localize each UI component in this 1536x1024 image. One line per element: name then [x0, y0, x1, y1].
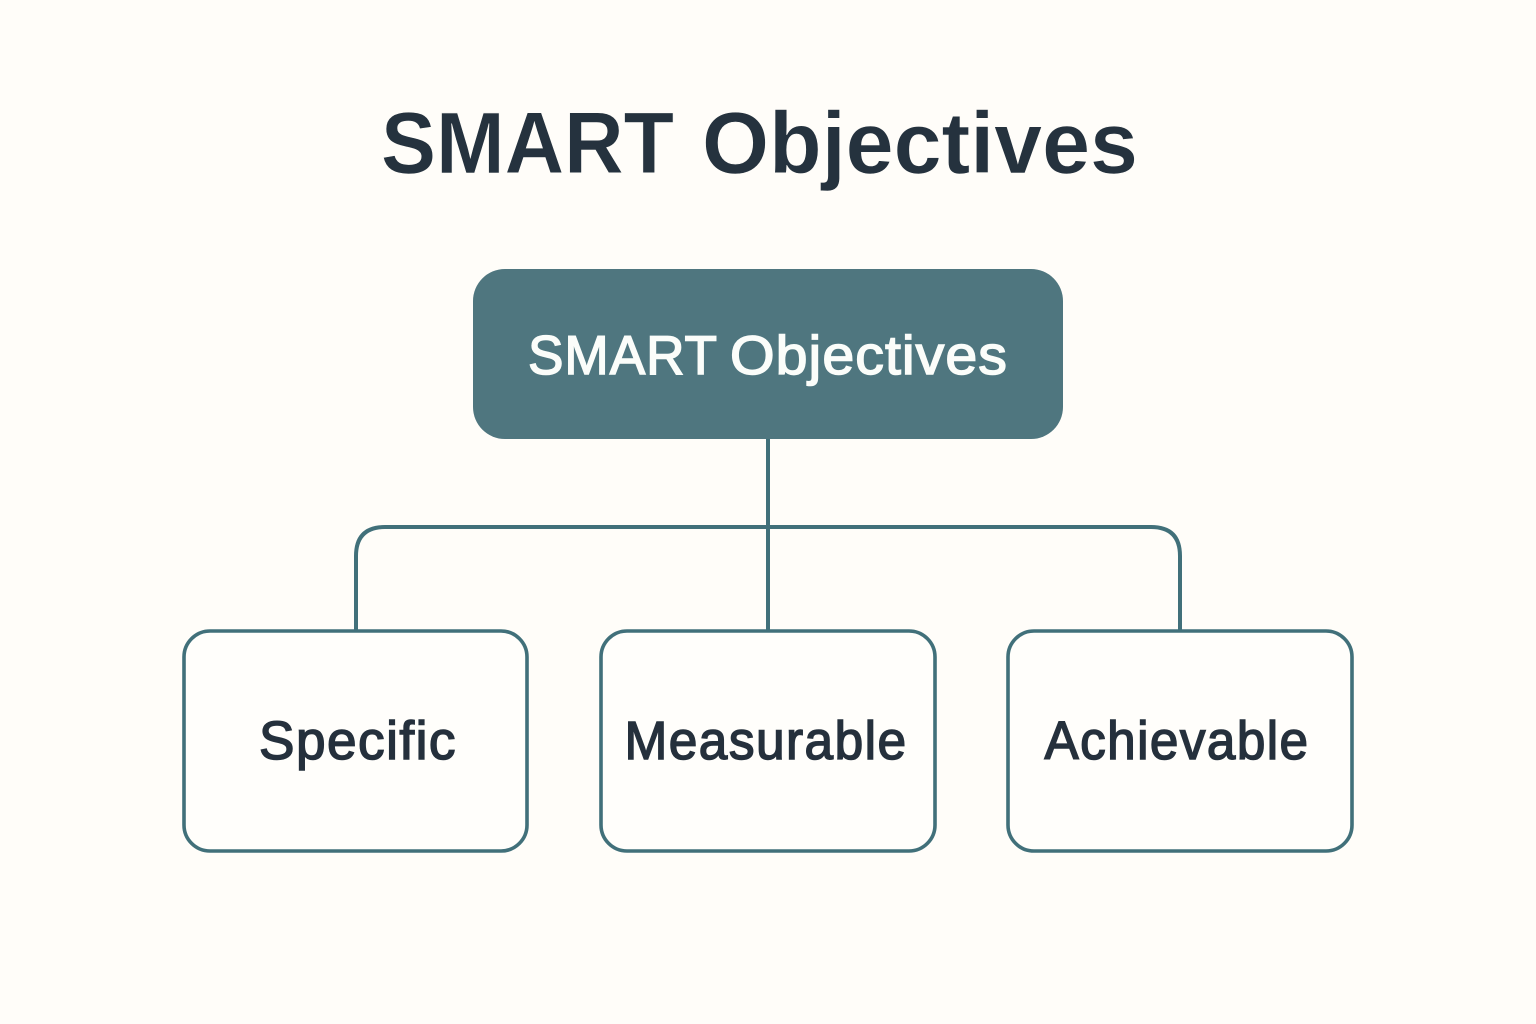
title: SMART — [381, 95, 674, 192]
box: Measurable — [601, 631, 935, 851]
connector lines — [356, 438, 1180, 631]
root box: SMART Objectives — [473, 269, 1063, 439]
root box: SMART Objectives: Objectives — [730, 324, 1008, 386]
box: Measurable: Measurable — [624, 711, 908, 771]
root box: SMART Objectives: SMART — [528, 324, 718, 386]
title: Objectives — [702, 95, 1138, 192]
box: Specific — [184, 631, 527, 851]
box: Achievable: Achievable — [1044, 711, 1310, 771]
box: Achievable — [1008, 631, 1352, 851]
box: Specific: Specific — [259, 711, 457, 771]
title — [381, 95, 1138, 192]
